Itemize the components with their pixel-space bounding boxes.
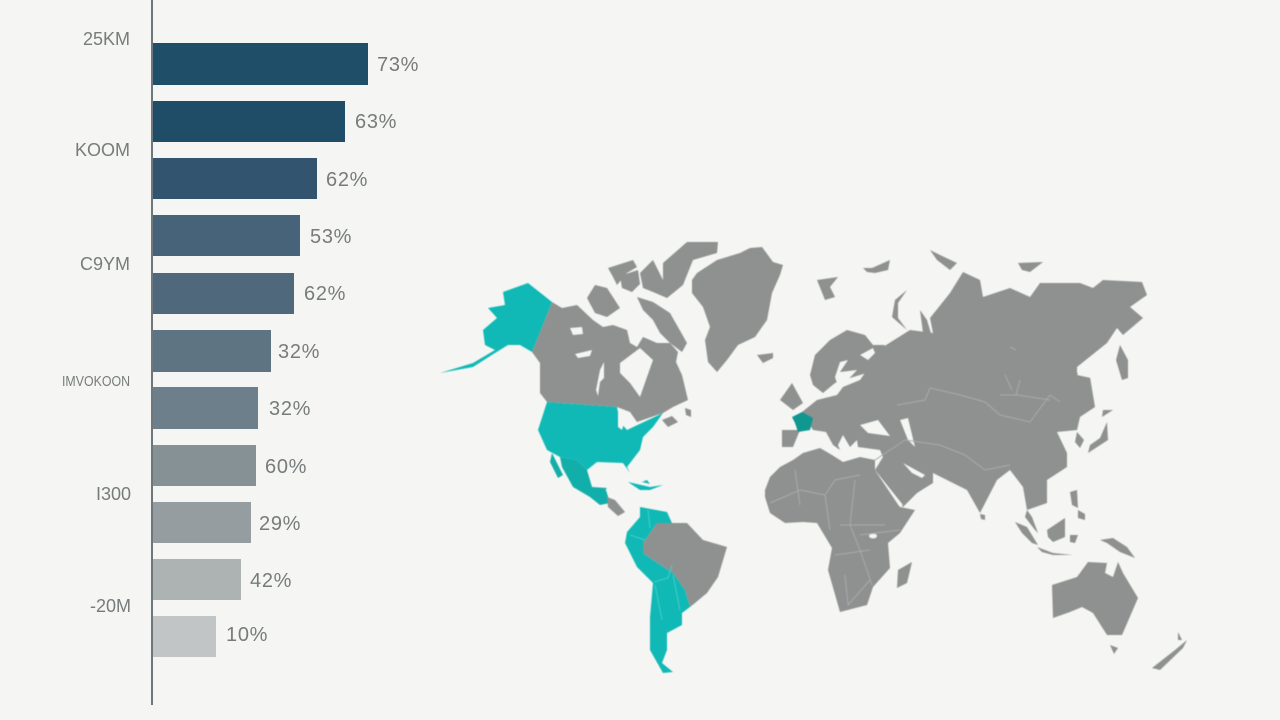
percentage labels: 60% <box>265 456 307 478</box>
chart axis <box>151 0 153 705</box>
percentage labels: 73% <box>377 54 419 76</box>
percentage labels: 62% <box>304 283 346 305</box>
Eurasia, Africa and Oceania <box>765 250 1187 670</box>
world map <box>440 242 1187 673</box>
percentage labels: 10% <box>226 624 268 646</box>
Great Lakes <box>618 412 635 430</box>
percentage labels: 32% <box>278 341 320 363</box>
map borders: Africa and Asia <box>770 347 1060 605</box>
axis labels: KOOM <box>75 140 130 160</box>
axis labels: C9YM <box>80 254 130 274</box>
Hudson Bay and northern lakes <box>570 327 653 397</box>
percentage labels: 29% <box>259 513 301 535</box>
percentage labels: 53% <box>310 226 352 248</box>
map borders: South America <box>630 510 680 620</box>
Mexico and Central America <box>550 453 610 505</box>
North America: Canada, arctic islands and Greenland <box>532 242 783 427</box>
percentage labels: 32% <box>269 398 311 420</box>
axis labels: IMVOKOON <box>62 373 130 390</box>
percentage labels: 42% <box>250 570 292 592</box>
axis labels: -20M <box>90 596 131 616</box>
axis labels <box>62 29 131 616</box>
percentage labels: 62% <box>326 169 368 191</box>
percentage labels: 63% <box>355 111 397 133</box>
bars <box>153 43 368 657</box>
axis labels: I300 <box>96 484 131 504</box>
axis labels: 25KM <box>83 29 130 49</box>
panel: bar chart <box>62 0 419 705</box>
inland seas <box>835 340 1113 538</box>
percentage labels <box>226 54 419 646</box>
highlighted countries: Americas <box>440 283 690 673</box>
Central America and Brazil <box>607 497 727 607</box>
France highlight <box>792 412 813 432</box>
